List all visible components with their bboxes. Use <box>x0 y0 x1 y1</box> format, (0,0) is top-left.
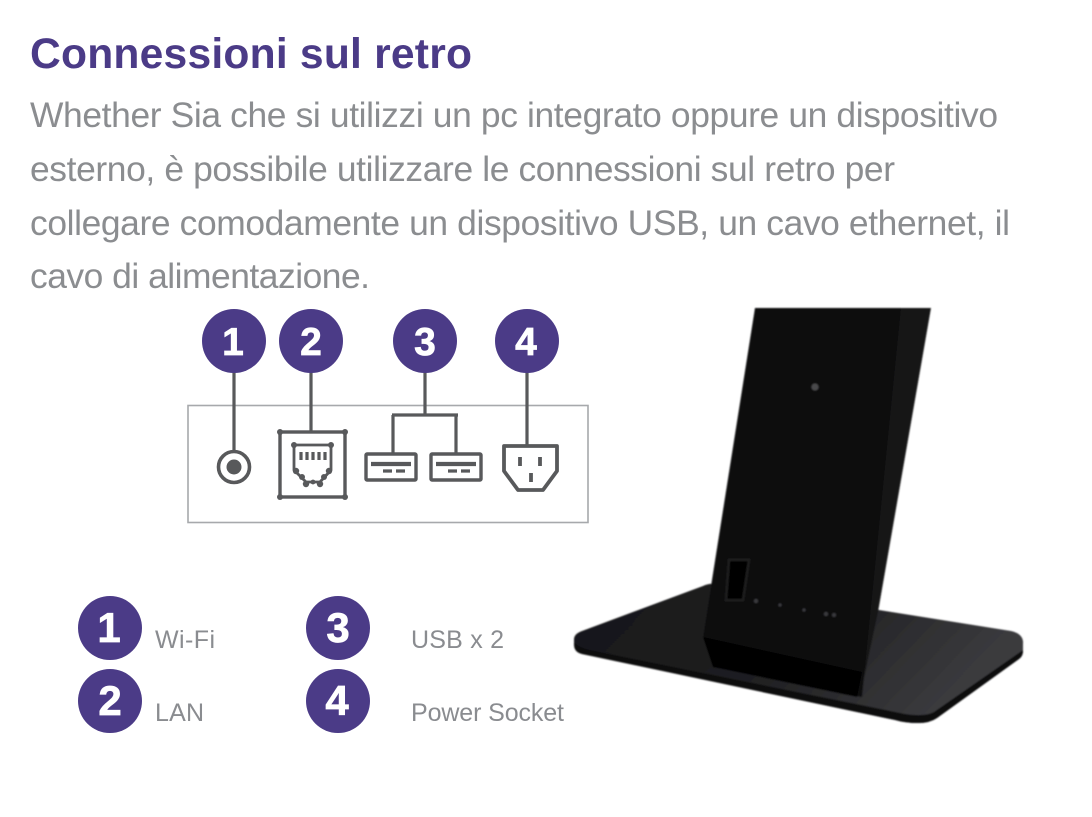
legend item 4: Power Socket: Power Socket <box>411 699 564 727</box>
number badge 1 <box>202 309 266 373</box>
legend <box>78 596 564 733</box>
stand column side <box>840 308 931 697</box>
text block: description <box>30 95 1010 296</box>
icon: Wi-Fi antenna socket <box>218 452 250 482</box>
number badge 2 <box>279 309 343 373</box>
legend item 2: LAN: 2 <box>98 677 122 724</box>
text block: description: cavo di alimentazione. <box>30 256 370 296</box>
text block: description: Whether Sia che si utilizzi un pc integrato oppure un dispositivo <box>30 95 998 135</box>
stand foot shadow <box>703 637 862 697</box>
connector lines <box>234 372 527 454</box>
number badge 3 <box>393 309 457 373</box>
legend item 1: Wi-Fi: 1 <box>97 604 121 651</box>
product photo: kiosk stand rear <box>574 308 1023 723</box>
number badge 2: 2 <box>300 321 322 364</box>
legend item 3: USB x 2: USB x 2 <box>411 626 504 654</box>
text block: description: esterno, è possibile utilizzare le connessioni sul retro per <box>30 149 895 189</box>
rear cover panel <box>737 379 874 511</box>
connector panel frame <box>188 406 588 522</box>
number badge 3: 3 <box>414 321 436 364</box>
screw <box>812 384 818 390</box>
number badge 4 <box>495 309 559 373</box>
stand base <box>574 584 1023 723</box>
legend item 4: Power Socket <box>306 669 564 733</box>
USB slot <box>726 560 749 600</box>
legend item 1: Wi-Fi <box>78 596 215 660</box>
title: Connessioni sul retro <box>30 30 472 78</box>
legend item 3: USB x 2 <box>306 596 504 660</box>
legend item 4: Power Socket: 4 <box>325 677 349 724</box>
rear ports <box>754 599 836 617</box>
stand base front edge <box>574 642 1023 723</box>
legend item 2: LAN: LAN <box>155 699 204 727</box>
legend item 3: USB x 2: 3 <box>326 604 350 651</box>
icon: USB port left <box>366 454 416 480</box>
icon: USB port right <box>431 454 481 480</box>
number badge 1: 1 <box>222 321 244 364</box>
icon: power socket <box>504 446 557 490</box>
number badge 4: 4 <box>515 321 537 364</box>
stand column rear <box>703 308 901 697</box>
panel: connector diagram <box>188 309 588 522</box>
icon: LAN port <box>277 429 348 500</box>
text block: description: collegare comodamente un dispositivo USB, un cavo ethernet, il <box>30 203 1010 243</box>
legend item 2: LAN <box>78 669 204 733</box>
legend item 1: Wi-Fi: Wi-Fi <box>155 626 215 654</box>
